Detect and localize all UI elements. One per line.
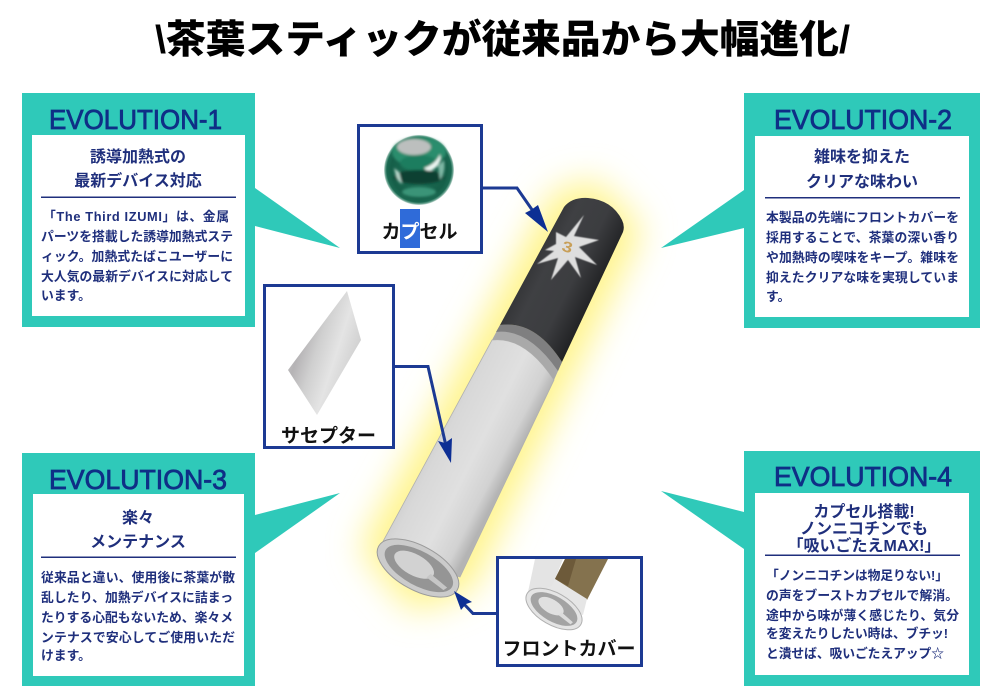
subheading 2: クリアな味わい <box>806 173 918 191</box>
icon: green capsule sphere <box>384 135 454 205</box>
body text 2 <box>766 210 959 304</box>
body text 1 <box>41 209 233 303</box>
body text 3: ンテナスで安心してご使用いただ <box>41 630 235 645</box>
heading: EVOLUTION-2: EVOLUTION-2 <box>774 104 952 135</box>
star logo <box>537 215 599 280</box>
subheading 1: 誘導加熱式の <box>90 147 186 166</box>
panel: EVOLUTION-4 <box>661 451 980 686</box>
body text 1: パーツを搭載した誘導加熱式ステ <box>41 229 233 244</box>
panel: EVOLUTION-2 <box>661 93 980 328</box>
subheading 3: メンテナンス <box>90 534 186 551</box>
label: capsule: カプセル <box>381 221 458 243</box>
body text 4 <box>766 568 959 661</box>
arrow: susceptor to stick body <box>395 366 452 463</box>
stick light body <box>380 340 554 577</box>
body text 1: ィック。加熱式たばこユーザーに <box>41 249 233 264</box>
subheading 3: 楽々 <box>122 508 154 527</box>
body text 4: の声をブーストカプセルで解消。 <box>766 588 958 603</box>
arrow: capsule to stick tip <box>483 188 548 232</box>
label: front cover: フロントカバー <box>502 638 636 660</box>
panel: EVOLUTION-3 <box>22 453 340 686</box>
panel: EVOLUTION-1 <box>22 93 340 327</box>
subheading 1 <box>74 147 202 190</box>
body text 1: 「The Third IZUMI」は、金属 <box>43 209 229 224</box>
body text 3: たりする心配もないため、楽々メ <box>41 610 233 625</box>
subheading 4: ノンニコチンでも <box>800 520 928 538</box>
subheading 3 <box>90 508 186 551</box>
body text 2: 抑えたクリアな味を実現していま <box>766 270 959 285</box>
callout: capsule <box>358 126 482 252</box>
heading: EVOLUTION-4: EVOLUTION-4 <box>774 461 952 492</box>
star logo: 3 <box>560 238 574 257</box>
body text 1: います。 <box>41 288 91 303</box>
title: \茶葉スティックが従来品から大幅進化/ <box>155 18 850 62</box>
stick <box>368 198 624 609</box>
heading: EVOLUTION-3: EVOLUTION-3 <box>49 464 227 495</box>
body text 4: と潰せば、吸いごたえアップ☆ <box>766 646 944 661</box>
callout: susceptor <box>264 286 394 448</box>
body text 2: や加熱時の喫味をキープ。雑味を <box>766 250 959 265</box>
subheading 4: カプセル搭載! <box>813 502 915 521</box>
stick gray band <box>492 324 562 380</box>
stick yellow glow <box>380 198 623 593</box>
body text 4: 「ノンニコチンは物足りない!」 <box>766 568 948 583</box>
subheading 4 <box>788 502 940 555</box>
body text 3: 乱したり、加熱デバイスに詰まっ <box>41 590 233 605</box>
callout: front cover <box>498 558 642 666</box>
subheading 1: 最新デバイス対応 <box>74 171 202 190</box>
body text 4: 途中から味が薄く感じたり、気分 <box>766 608 959 623</box>
subheading 2 <box>806 148 918 191</box>
label: susceptor: サセプター <box>281 425 376 447</box>
icon: susceptor foil <box>288 291 361 415</box>
subheading 2: 雑味を抑えた <box>814 148 910 166</box>
body text 3 <box>41 570 235 663</box>
body text 3: 従来品と違い、使用後に茶葉が散 <box>41 570 235 585</box>
highlight block <box>400 209 420 248</box>
body text 1: 大人気の最新デバイスに対応して <box>41 269 233 284</box>
heading: EVOLUTION-1: EVOLUTION-1 <box>49 104 222 135</box>
body text 2: す。 <box>766 289 790 304</box>
subheading 4: 「吸いごたえMAX!」 <box>788 536 940 555</box>
body text 2: 採用することで、茶葉の深い香り <box>766 230 959 245</box>
arrow: front cover to stick end <box>454 591 496 614</box>
body text 4: を変えたりしたい時は、ブチッ! <box>766 626 948 641</box>
stick end face <box>368 527 468 609</box>
body text 2: 本製品の先端にフロントカバーを <box>766 210 959 225</box>
stick dark tip <box>500 198 624 362</box>
icon: front cover cutaway <box>519 559 608 638</box>
body text 3: けます。 <box>41 648 91 663</box>
